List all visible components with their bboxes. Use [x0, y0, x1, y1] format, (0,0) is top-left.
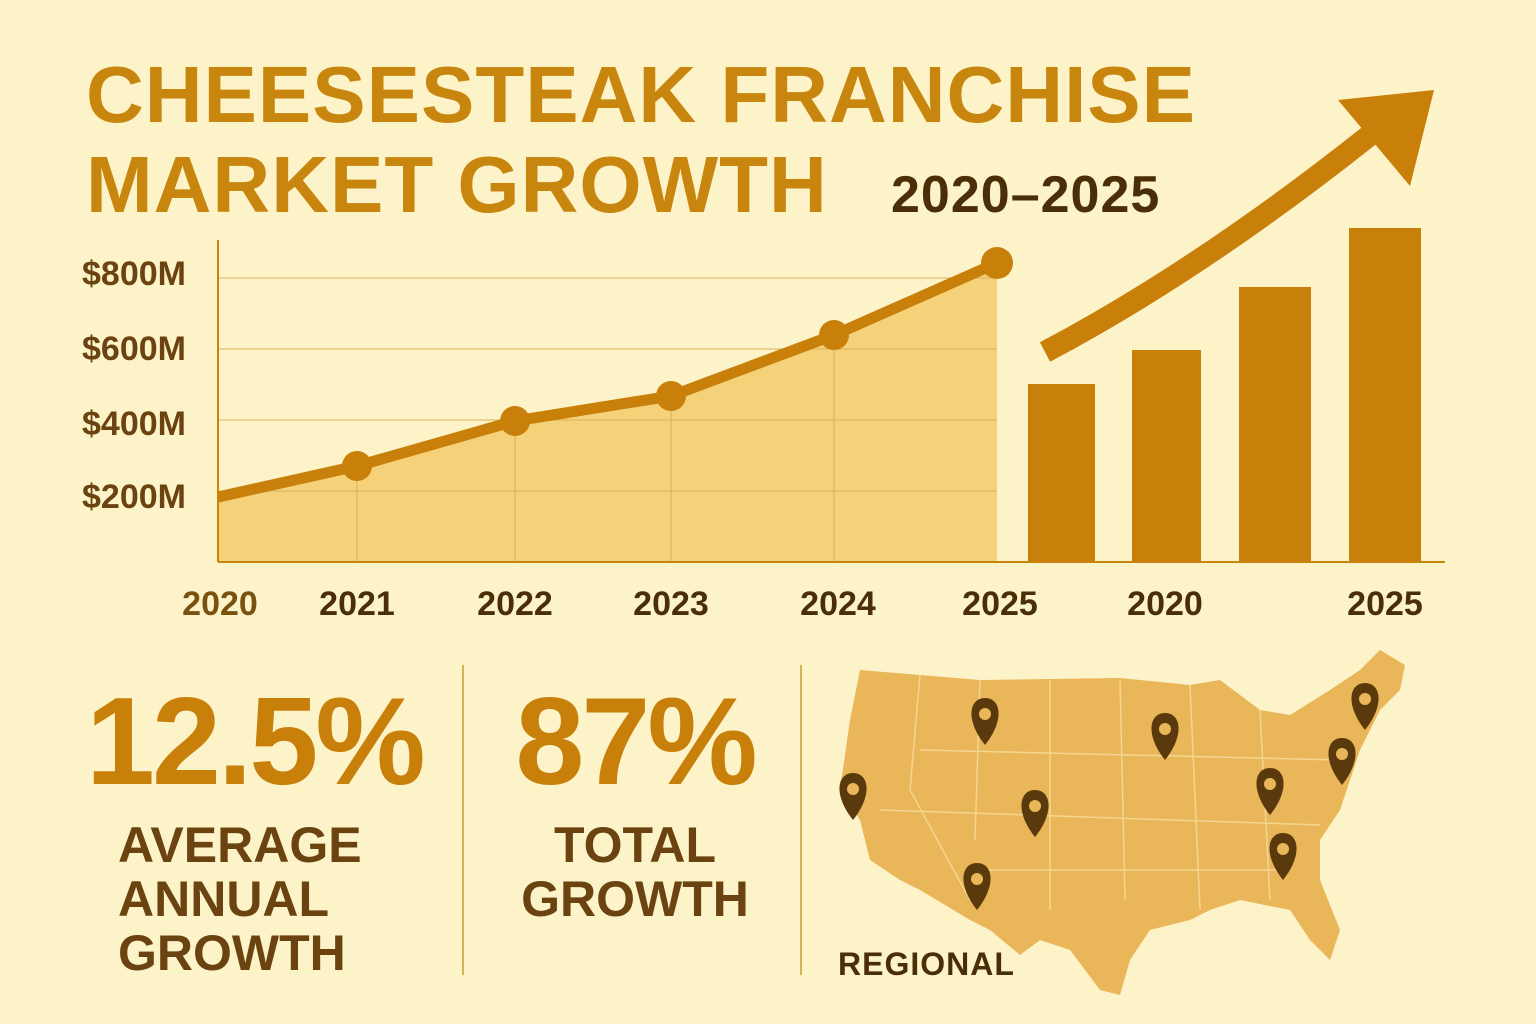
stat: average annual growth: ANNUAL: [118, 871, 329, 927]
x labels: 2022: [477, 585, 553, 623]
y axis labels: $800M: [82, 255, 186, 293]
stat: average annual growth: 12.5%: [86, 673, 423, 811]
x labels: 2020: [1127, 585, 1203, 623]
stat: average annual growth: [86, 673, 423, 981]
chart: line and bar: [82, 90, 1445, 623]
title: CHEESESTEAK FRANCHISE: [86, 50, 1196, 139]
title: [86, 50, 1196, 229]
x labels: 2020: [182, 585, 258, 623]
pins: [839, 683, 1379, 910]
area chart: [218, 240, 1445, 562]
x labels: 2021: [319, 585, 395, 623]
y axis labels: $400M: [82, 405, 186, 443]
stat: average annual growth: AVERAGE: [118, 817, 362, 873]
stat: total growth: GROWTH: [521, 871, 749, 927]
map: regional: [838, 650, 1405, 995]
stat: total growth: TOTAL: [554, 817, 716, 873]
title: MARKET GROWTH 2020–2025: [86, 140, 1160, 229]
x labels: [182, 585, 1423, 623]
x labels: 2025: [1347, 585, 1423, 623]
x labels: 2023: [633, 585, 709, 623]
stat: total growth: 87%: [515, 673, 755, 811]
y axis labels: $600M: [82, 330, 186, 368]
y axis labels: $200M: [82, 478, 186, 516]
x labels: 2025: [962, 585, 1038, 623]
y axis labels: [82, 255, 186, 516]
x labels: 2024: [800, 585, 876, 623]
bars: [1028, 228, 1421, 562]
label: REGIONAL: [838, 946, 1015, 982]
stat: average annual growth: GROWTH: [118, 925, 346, 981]
stat: total growth: [515, 673, 755, 927]
arrow: [1045, 90, 1434, 352]
